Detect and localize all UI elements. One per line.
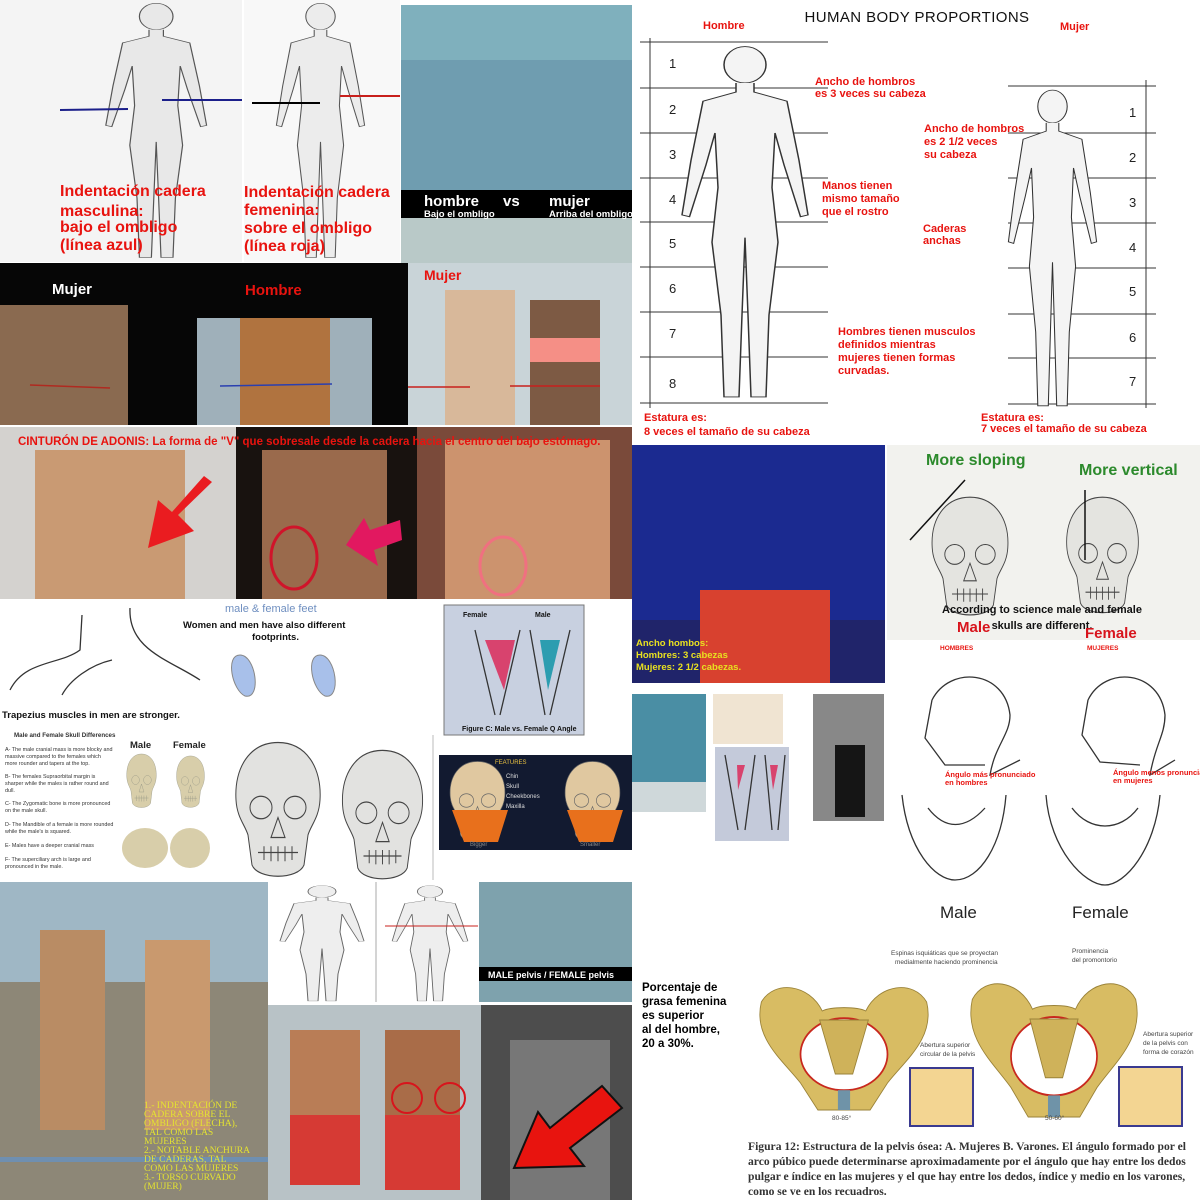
panel: pelvis comparison: Abertura superior [1143,1031,1194,1038]
label: shape note: mujeres tienen formas [838,352,955,364]
panel: trapezius [2,608,200,721]
text block: skull differences: B- The females Supraorbital margin is [5,774,96,780]
panel: pelvis comparison: circular de la pelvis [920,1051,976,1058]
panel: feet: footprints. [252,632,299,643]
caption: female hip: femenina: [244,202,320,219]
panel: beach comparison block [401,5,633,263]
label: vertical: More vertical [1079,462,1178,479]
label: hips: anchas [923,235,961,247]
panel: female seven heads chart: 7 [1129,374,1136,389]
panel: female seven heads chart [838,21,1156,435]
panel: repeat diagrams [280,882,632,1002]
label: shape note: Hombres tienen musculos [838,326,976,338]
label: hands: que el rostro [822,206,889,218]
panel: male eight heads chart: 1 [669,56,676,71]
icon: red arrow [514,1086,622,1168]
panel: pelvis comparison: Espinas isquiáticas que se proyectan [891,950,998,957]
label: shoulders: es 2 1/2 veces [924,136,997,148]
text block: skull differences: Male and Female Skull Differences [14,732,116,739]
caption: shoulder width: Mujeres: 2 1/2 cabezas. [636,662,741,673]
panel: pelvis comparison: 80-85° [832,1114,852,1122]
label: shoulders: Ancho de hombros [924,123,1024,135]
list: right column: 3.- TORSO CURVADO [144,1172,236,1183]
marker: circles [271,527,317,589]
panel: Adonis belt [0,427,632,599]
text block: skull differences: massive compared to the females which [5,754,101,760]
list: right column: (MUJER) [144,1181,182,1192]
list: right column: 1.- INDENTACIÓN DE [144,1099,237,1111]
label: Hombre: Hombre [703,20,745,32]
label: sloping: More sloping [926,452,1026,469]
caption: pelvis figure: pulgar e índice en las mujeres y el que hay entre los dedos, índice y medio en los varones, [748,1170,1185,1183]
text block: skull differences: while the male's is squared. [4,829,71,835]
text block: body fat: grasa femenina [642,996,727,1008]
panel: female seven heads chart: 1 [1129,105,1136,120]
panel: coloured skulls: Cheekbones [506,794,540,800]
panel: jaw profiles: Male [957,619,990,636]
panel: Q angle: Figure C: Male vs. Female Q Angle [462,726,577,733]
panel: coloured skulls: Skull [506,784,519,790]
panel: Q angle: Male [535,612,551,619]
panel: pelvis comparison: Prominencia [1072,948,1109,955]
panel: male proportion diagram [0,0,242,262]
panel: skull slope [887,445,1200,640]
panel: jaw profiles: en mujeres [1113,776,1153,785]
panel: jaw profiles: Ángulo más pronunciado [945,770,1036,779]
caption: pelvis: MALE pelvis / FEMALE pelvis [488,970,614,980]
text block: skull differences: A- The male cranial mass is more blocky and [5,747,112,753]
panel: coloured skulls: Bigger [470,842,487,848]
text block: skull differences: D- The Mandible of a female is more rounded [5,822,113,828]
icon: pink arrow [346,518,402,566]
label: hands: Manos tienen [822,180,893,192]
caption: hombre vs mujer: mujer [549,193,590,210]
list: right column: TAL COMO LAS [144,1127,213,1138]
list: right column: COMO LAS MUJERES [144,1163,238,1174]
panel: pelvis comparison: del promontorio [1072,957,1118,964]
panel: male eight heads chart: 6 [669,281,676,296]
panel: male eight heads chart: 2 [669,102,676,117]
label: shape note: definidos mientras [838,339,936,351]
caption: male hip: bajo el ombligo [60,219,178,236]
panel: small skulls: Male [130,740,151,751]
list: right column: CADERA SOBRE EL [144,1109,230,1120]
list: right column: DE CADERAS, TAL [144,1154,227,1165]
panel: beach block [0,882,268,1200]
text block: skull differences: F- The superciliary arch is large and [5,857,91,863]
panel: jaw profiles [925,619,1200,787]
panel: beach comparison block: Arriba del ombligo [549,209,633,220]
label: height: Estatura es: [981,412,1044,424]
panel: pelvis comparison: 50-60° [1045,1114,1065,1122]
panel: waist comparison [0,263,408,425]
panel: coloured skulls: Smaller [580,842,600,848]
text block: skull differences: pronounced in the male. [5,864,63,870]
panel: street block [408,263,632,425]
panel: coloured skulls: Chin [506,774,518,780]
caption: hombre vs mujer: vs [503,193,520,210]
caption: male hip: Indentación cadera [60,183,206,200]
panel: male eight heads chart: 4 [669,192,676,207]
panel: male eight heads chart: 8 [669,376,676,391]
list: right column: MUJERES [144,1136,187,1147]
panel: jaw profiles: HOMBRES [940,645,974,652]
panel: Q angle: Female [463,612,487,619]
label: hands: mismo tamaño [822,193,900,205]
label: shape note: curvadas. [838,365,889,377]
label: Male: Male [940,903,977,922]
panel: pelvis comparison: forma de corazón [1143,1049,1194,1056]
panel: large skull drawings [236,735,433,880]
caption: male hip: (línea azul) [60,237,143,254]
panel: male eight heads chart: 7 [669,326,676,341]
list: right column: 2.- NOTABLE ANCHURA [144,1145,250,1156]
text block: skull differences: sharper while the males is rather round and [5,781,109,787]
panel: skull slope: skulls are different. [992,620,1092,632]
caption: female hip: Indentación cadera [244,184,390,201]
label: height: Estatura es: [644,412,707,424]
caption: pelvis figure: arco púbico puede determinarse aproximadamente por el ángulo que hay entre los dedos [748,1155,1186,1168]
icon: red arrow [148,476,212,548]
caption: pelvis figure: como se ve en los recuadros. [748,1185,887,1198]
panel: female seven heads chart: 3 [1129,195,1136,210]
panel: lower photo blocks [268,1005,632,1200]
caption: hombre vs mujer: hombre [424,193,479,210]
panel: jaw profiles: Female [1085,625,1137,642]
label: shoulders: Ancho de hombros [815,76,915,88]
panel: jaw profiles: en hombres [945,778,988,787]
panel: female seven heads chart: 2 [1129,150,1136,165]
list: right column: OMBLIGO (FLECHA), [144,1118,237,1129]
panel: coloured skulls: Maxilla [506,804,525,810]
text block: skull differences: dull. [5,788,15,794]
panel: small skulls: Female [173,740,206,751]
panel: pelvis comparison: de la pelvis con [1143,1040,1188,1047]
label: Female: Female [1072,903,1129,922]
label: height: 7 veces el tamaño de su cabeza [981,423,1148,435]
text block: skull differences: C- The Zygomatic bone is more pronounced [5,801,110,807]
panel: pelvis comparison: Abertura superior [920,1042,971,1049]
caption: Adonis: CINTURÓN DE ADONIS: La forma de "V" que sobresale desde la cadera hacia el centro del bajo estómago. [18,435,600,448]
caption: female hip: sobre el ombligo [244,220,372,237]
panel: trapezius: Trapezius muscles in men are stronger. [2,710,180,721]
text block: body fat: es superior [642,1010,705,1022]
label: hips: Caderas [923,223,966,235]
panel: female seven heads chart: 5 [1129,284,1136,299]
panel: pelvis comparison [760,948,1194,1126]
text block: body fat: 20 a 30%. [642,1038,694,1050]
text block: body fat: Porcentaje de [642,982,717,994]
panel: male eight heads chart: 3 [669,147,676,162]
text block: body fat: al del hombre, [642,1024,720,1036]
panel: jaw profiles: MUJERES [1087,645,1119,652]
caption: pelvis figure: Figura 12: Estructura de la pelvis ósea: A. Mujeres B. Varones. El ángulo formado por el [748,1140,1187,1153]
panel: coloured skulls: FEATURES [495,760,527,766]
panel: male eight heads chart [640,20,927,438]
caption: female hip: (línea roja) [244,238,325,255]
label: Mujer: Mujer [424,267,462,283]
caption: male hip: masculina: [60,203,144,220]
text block: skull differences: on the male skull. [5,808,47,814]
text block: skull differences: more rounder and tapers at the top. [5,761,90,767]
label: Mujer: Mujer [52,281,92,298]
text block: skull differences: E- Males have a deeper cranial mass [5,843,94,849]
caption: shoulder width: Ancho hombos: [636,638,708,649]
panel: small skulls [122,740,210,868]
panel: female proportion diagram [244,0,400,262]
text block: skull differences [4,732,116,870]
panel: female seven heads chart: 6 [1129,330,1136,345]
panel: blue block [632,445,885,683]
panel: feet: male & female feet [225,603,317,615]
panel: pelvis comparison: medialmente haciendo prominencia [895,959,998,966]
panel: male eight heads chart: 5 [669,236,676,251]
panel: beach comparison block: Bajo el ombligo [424,209,495,220]
label: shoulders: su cabeza [924,149,977,161]
title: HUMAN BODY PROPORTIONS [805,9,1029,26]
label: Mujer: Mujer [1060,21,1090,33]
panel: female seven heads chart: 4 [1129,240,1136,255]
panel: feet: Women and men have also different [183,620,346,631]
label: Hombre: Hombre [245,282,302,299]
label: height: 8 veces el tamaño de su cabeza [644,426,811,438]
caption: science: According to science male and female [942,604,1142,616]
panel: jaw outlines [902,795,1160,922]
caption: shoulder width: Hombres: 3 cabezas [636,650,728,661]
label: shoulders: es 3 veces su cabeza [815,88,927,100]
panel: coloured skulls [439,755,632,850]
panel: Q angle references [632,694,884,841]
panel: feet [183,603,346,696]
panel: Q angle [444,605,584,735]
